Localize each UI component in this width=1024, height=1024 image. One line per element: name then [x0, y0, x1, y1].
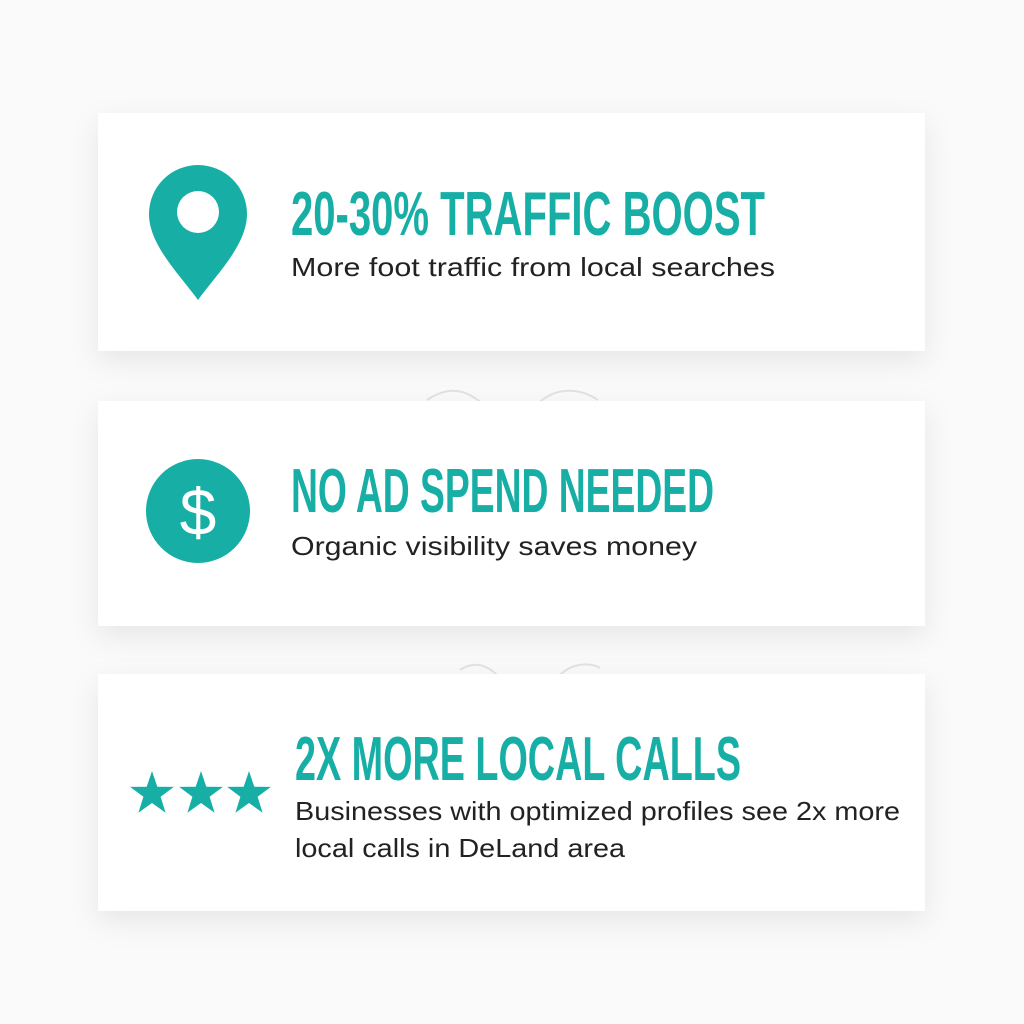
panel: no ad spend	[98, 401, 925, 626]
connector 2	[460, 664, 600, 687]
icon: dollar	[146, 459, 250, 563]
text: local calls description	[295, 796, 900, 863]
heading: traffic boost: 20-30% TRAFFIC BOOST	[291, 180, 765, 249]
heading: no ad spend: NO AD SPEND NEEDED	[291, 457, 714, 526]
text: local calls description: local calls in DeLand area	[295, 833, 626, 863]
icon: map pin	[149, 165, 247, 300]
icon: dollar: $	[180, 475, 216, 549]
icon: stars	[130, 771, 271, 813]
text: no ad spend description: Organic visibility saves money	[291, 531, 697, 561]
heading: local calls: 2X MORE LOCAL CALLS	[295, 725, 741, 794]
panel: traffic boost	[98, 113, 925, 351]
panel: local calls	[98, 674, 925, 911]
text: local calls description: Businesses with optimized profiles see 2x more	[295, 796, 900, 826]
text: traffic boost description: More foot traffic from local searches	[291, 252, 775, 282]
connector 1	[427, 391, 598, 410]
